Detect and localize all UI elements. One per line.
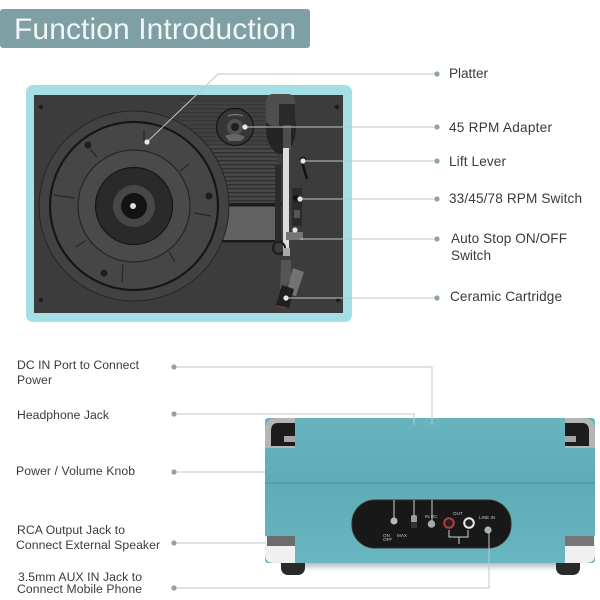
dark deck plate bbox=[34, 95, 343, 313]
label: headphone jack bbox=[17, 408, 177, 422]
connector panel bbox=[352, 500, 511, 548]
callout anchor dots on photo bbox=[144, 124, 306, 301]
label: ceramic cartridge: Ceramic Cartridge bbox=[450, 289, 562, 304]
panel captions: LINE IN bbox=[479, 515, 495, 520]
screws bbox=[39, 105, 340, 302]
line in jack bbox=[484, 526, 492, 534]
label: dc in port bbox=[17, 358, 177, 387]
tonearm bbox=[266, 94, 304, 308]
label: speed switch: 33/45/78 RPM Switch bbox=[449, 191, 582, 206]
panel captions: IN DC bbox=[425, 514, 438, 519]
label: dc in port: DC IN Port to Connect bbox=[17, 358, 140, 372]
panel captions: ON bbox=[383, 533, 390, 538]
floor shadow bbox=[300, 563, 560, 571]
metal corners bbox=[265, 418, 595, 563]
label: auto stop switch: Auto Stop ON/OFF bbox=[451, 231, 567, 246]
speed switch plate bbox=[286, 188, 303, 240]
turntable top view bbox=[26, 85, 352, 322]
label: power volume knob: Power / Volume Knob bbox=[16, 464, 135, 478]
panel captions: OUT bbox=[453, 511, 463, 516]
label: headphone jack: Headphone Jack bbox=[17, 408, 110, 422]
title banner: Function Introduction bbox=[14, 13, 296, 46]
callout lines: rear view bbox=[174, 367, 489, 588]
label: aux in jack: 3.5mm AUX IN Jack to bbox=[18, 570, 142, 584]
label: 45 RPM adapter: 45 RPM Adapter bbox=[449, 120, 552, 135]
teal case body bbox=[265, 418, 595, 563]
lift lever bbox=[300, 156, 307, 179]
teal case frame bbox=[26, 85, 352, 322]
label: aux in jack bbox=[17, 570, 177, 596]
label: rca output jack: Connect External Speaker bbox=[16, 538, 160, 552]
45 RPM adapter bbox=[216, 108, 254, 146]
label: rca output jack bbox=[16, 523, 177, 552]
platter bbox=[39, 111, 229, 301]
rear feet bbox=[281, 556, 580, 575]
right labels bbox=[434, 66, 582, 304]
panel captions: OFF bbox=[383, 537, 392, 542]
label: auto stop switch bbox=[434, 231, 567, 263]
volume knob bbox=[390, 518, 398, 524]
rca jacks bbox=[444, 518, 454, 528]
label: dc in port: Power bbox=[17, 373, 52, 387]
dc port bbox=[428, 520, 435, 528]
left labels bbox=[16, 358, 177, 596]
label: lift lever: Lift Lever bbox=[449, 154, 506, 169]
label: aux in jack: Connect Mobile Phone bbox=[17, 582, 142, 596]
label: rca output jack: RCA Output Jack to bbox=[17, 523, 125, 537]
callout lines: top view bbox=[147, 74, 437, 298]
deck ribbed section bbox=[180, 100, 282, 242]
panel captions bbox=[383, 511, 495, 542]
turntable rear view bbox=[265, 418, 595, 575]
panel captions: MAX bbox=[397, 533, 407, 538]
label: platter: Platter bbox=[449, 66, 488, 81]
label: auto stop switch: Switch bbox=[451, 248, 491, 263]
headphone switch bbox=[411, 515, 417, 525]
